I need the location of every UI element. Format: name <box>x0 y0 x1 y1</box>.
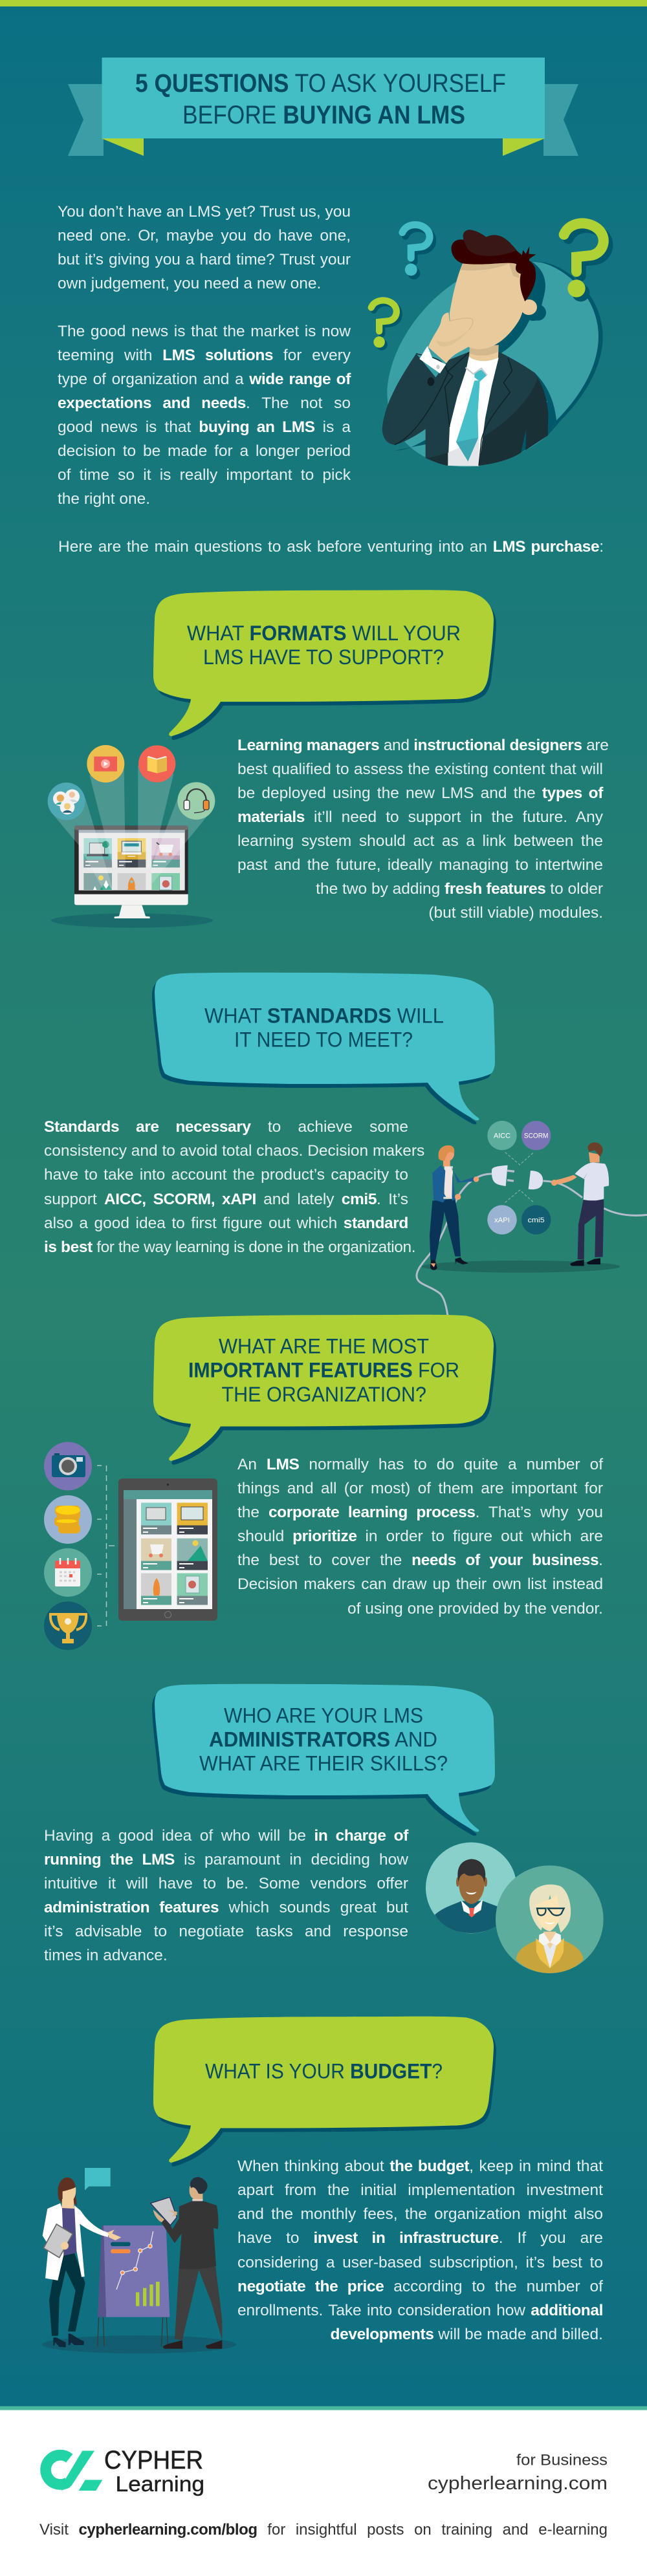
body text: formats: learning system should act as a link between the <box>237 832 603 850</box>
logo: Cypher Learning <box>46 2446 204 2496</box>
body text: administrators: intuitive it will have to be. Some vendors offer <box>44 1875 408 1892</box>
dashed connector lines <box>97 1466 115 1626</box>
footer links <box>428 2451 608 2494</box>
body text: budget <box>237 2158 603 2343</box>
title banner <box>68 58 578 156</box>
tablet cards <box>141 1503 208 1605</box>
body text: standards: have to take into account the product’s capacity to <box>44 1166 408 1184</box>
intro paragraph 2: type of organization and a wide range of <box>58 371 351 388</box>
body text: formats: be deployed using the new LMS and the types of <box>237 785 603 802</box>
standard badges: SCORM <box>524 1132 548 1140</box>
body text: administrators: running the LMS is paramount in deciding how <box>44 1851 408 1868</box>
body text: administrators: it’s advisable to negotiate tasks and response <box>44 1923 408 1940</box>
plugs <box>492 1165 543 1189</box>
suit jacket <box>382 351 548 466</box>
body text: standards: consistency and to avoid total chaos. Decision makers <box>44 1142 424 1160</box>
icon: video <box>87 745 124 783</box>
body text: formats: the two by adding fresh features to older <box>316 880 603 898</box>
question heading: WHAT FORMATS WILL YOUR <box>187 622 461 645</box>
speech bubble: formats <box>153 590 496 740</box>
logo mark <box>46 2451 102 2491</box>
hand and cuff <box>428 312 473 363</box>
man <box>551 1142 609 1266</box>
intro paragraph 2: of time so it is really important to pick <box>58 466 351 484</box>
body text: administrators: Having a good idea of who will be in charge of <box>44 1827 408 1845</box>
standard badges: xAPI <box>494 1217 510 1224</box>
body text: features: Decision makers can draw up their own list instead <box>237 1575 603 1593</box>
speech bubble: features <box>153 1315 496 1465</box>
footer links: cypherlearning.com <box>428 2473 608 2494</box>
footer links: for Business <box>516 2451 608 2469</box>
icon: camera <box>44 1442 92 1490</box>
body text: standards: also a good idea to first figure out which standard <box>44 1215 408 1232</box>
intro paragraph 2: expectations and needs. The not so <box>58 395 351 412</box>
body text: features: An LMS normally has to do quite a number of <box>237 1456 603 1473</box>
body text: formats: (but still viable) modules. <box>428 904 603 922</box>
title text: 5 QUESTIONS TO ASK YOURSELF <box>135 69 506 98</box>
body text: administrators <box>44 1827 409 1964</box>
body text: standards <box>44 1118 424 1256</box>
footer panel <box>0 2406 647 2576</box>
intro closing line: Here are the main questions to ask before venturing into an LMS purchase: <box>58 538 604 556</box>
question heading: WHAT STANDARDS WILL <box>204 1004 444 1027</box>
speech bubble: administrators: WHAT ARE THEIR SKILLS? <box>199 1751 448 1775</box>
body text: standards: is best for the way learning is done in the organization. <box>44 1239 415 1256</box>
body text: formats: best qualified to assess the existing content that will <box>237 761 603 778</box>
body text: features: the best to cover the needs of your business. <box>237 1552 603 1569</box>
body text: budget: developments will be made and billed. <box>331 2326 603 2343</box>
shirt and tie <box>448 356 499 466</box>
intro paragraph 1: You don’t have an LMS yet? Trust us, you <box>58 203 351 221</box>
body text: budget: apart from the initial implementation investment <box>237 2181 603 2199</box>
icon: headset <box>177 782 215 819</box>
question marks <box>371 223 608 351</box>
avatar: man <box>426 1843 517 1933</box>
body text: features: should prioritize in order to figure out which are <box>237 1528 603 1545</box>
illustration: thinking man with question marks <box>371 223 608 467</box>
light beams <box>50 797 113 891</box>
question heading: WHAT ARE THE MOST <box>219 1335 429 1358</box>
question heading: WHO ARE YOUR LMS <box>224 1704 423 1727</box>
standard badges: AICC <box>494 1132 510 1140</box>
body text: features: the corporate learning process. That’s why you <box>237 1504 603 1521</box>
intro paragraph 2: the right one. <box>58 490 150 508</box>
icon: calendar <box>44 1548 92 1597</box>
small speech bubble <box>85 2168 111 2191</box>
title banner: BEFORE BUYING AN LMS <box>182 101 465 129</box>
body text: budget: When thinking about the budget, keep in mind that <box>237 2158 603 2175</box>
illustration: monitor with content icons <box>48 745 215 927</box>
intro paragraph 2: decision to be made for a longer period <box>58 442 351 460</box>
icon: book <box>138 745 175 783</box>
cables <box>417 1174 492 1316</box>
intro paragraph 2 <box>58 323 351 508</box>
speech bubble: administrators: ADMINISTRATORS AND <box>209 1727 437 1751</box>
woman <box>43 2178 121 2347</box>
woman <box>430 1145 479 1270</box>
logo: Cypher Learning: CYPHER <box>104 2446 203 2474</box>
speech bubble: budget <box>153 2017 496 2167</box>
intro paragraph 2: good news is that buying an LMS is a <box>58 418 351 436</box>
dashed connectors <box>505 1153 534 1202</box>
body text: formats: Learning managers and instructional designers are <box>237 736 609 754</box>
intro paragraph 1: own judgement, you need a new one. <box>58 275 321 292</box>
body text: budget: negotiate the price according to the number of <box>237 2278 603 2295</box>
body text: administrators: times in advance. <box>44 1947 168 1964</box>
top accent bar <box>0 0 647 6</box>
icon: trophy <box>44 1601 92 1650</box>
intro paragraph 2: The good news is that the market is now <box>58 323 351 340</box>
body text: features: of using one provided by the vendor. <box>347 1600 603 1618</box>
logo: Cypher Learning: Learning <box>115 2472 204 2496</box>
neck <box>469 345 499 361</box>
speech bubble: standards: IT NEED TO MEET? <box>234 1028 413 1052</box>
body text: administrators: administration features which sounds great but <box>44 1899 408 1916</box>
hair <box>452 230 536 301</box>
chart board <box>98 2225 170 2346</box>
intro paragraph 1: need one. Or, maybe you do have one, <box>58 227 351 244</box>
body text: standards: Standards are necessary to achieve some <box>44 1118 408 1136</box>
intro paragraph 1 <box>58 203 351 292</box>
illustration: tablet <box>118 1478 217 1621</box>
body text: budget: and the monthly fees, the organization might also <box>237 2205 603 2223</box>
body text: formats: past and the future, ideally managing to intertwine <box>237 856 603 874</box>
illustration: two people at a chart board <box>42 2168 236 2354</box>
body text: budget: considering a user-based subscription, it’s best to <box>237 2254 603 2271</box>
icon: coins <box>44 1495 92 1544</box>
body text: standards: support AICC, SCORM, xAPI and lately cmi5. It’s <box>44 1191 408 1208</box>
footer visit line: Visit cypherlearning.com/blog for insightful posts on training and e-learning <box>39 2521 608 2538</box>
speech bubble: administrators <box>152 1684 495 1835</box>
speech bubble: formats: LMS HAVE TO SUPPORT? <box>203 645 444 669</box>
intro paragraph 1: but it’s giving you a hard time? Trust your <box>58 251 351 268</box>
speech bubble: features: IMPORTANT FEATURES FOR <box>188 1358 459 1381</box>
body text: features: things and all (or most) of them are important for <box>237 1480 603 1497</box>
body text: formats <box>237 736 609 922</box>
speech bubble: standards <box>152 973 495 1124</box>
screen cards <box>83 838 180 890</box>
intro paragraph 2: teeming with LMS solutions for every <box>58 347 351 364</box>
avatar: woman <box>496 1865 604 1973</box>
body text: formats: materials it’ll need to support in the future. Any <box>237 808 603 826</box>
question heading: WHAT IS YOUR BUDGET? <box>205 2059 443 2083</box>
illustration: administrators avatars <box>426 1843 604 1973</box>
icon: people <box>48 783 85 820</box>
man <box>151 2177 222 2349</box>
head <box>450 260 524 349</box>
body text: budget: enrollments. Take into consideration how additional <box>237 2302 603 2319</box>
body text: budget: have to invest in infrastructure. If you are <box>237 2229 603 2247</box>
standard badges <box>487 1121 551 1235</box>
body text: features <box>237 1456 603 1618</box>
standard badges: cmi5 <box>528 1217 545 1224</box>
illustration: two people connecting a plug <box>417 1121 647 1316</box>
speech bubble: features: THE ORGANIZATION? <box>221 1383 426 1406</box>
